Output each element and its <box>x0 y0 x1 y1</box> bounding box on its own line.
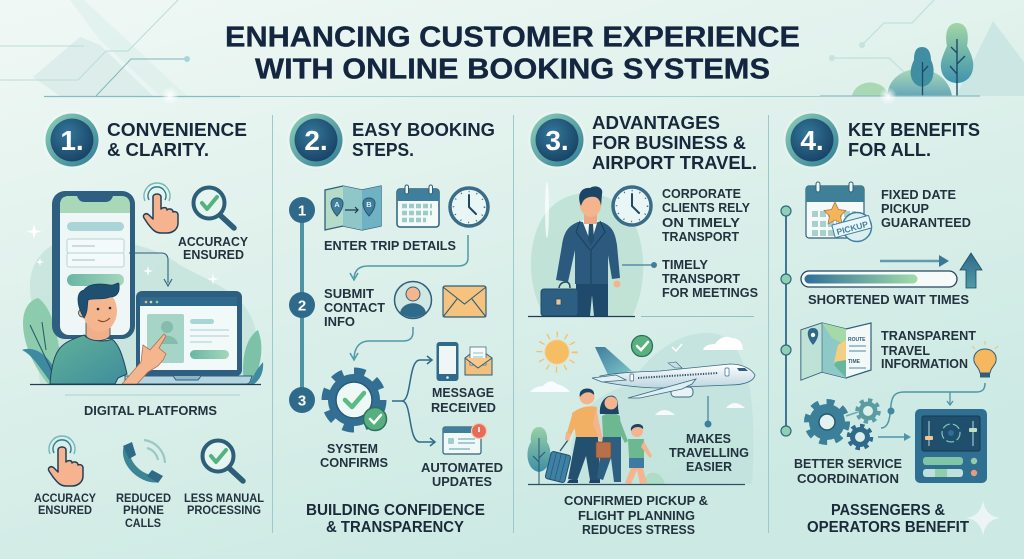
label: fixed date pickup guaranteed: GUARANTEED <box>881 215 971 230</box>
panel 2: easy booking steps <box>287 111 503 536</box>
illustration: airplane <box>592 347 755 398</box>
badge 4 <box>783 111 841 169</box>
timeline steps 1 to 3: 2 <box>298 298 306 314</box>
label: system confirms: CONFIRMS <box>320 455 388 470</box>
heading 2: EASY BOOKING <box>352 119 495 140</box>
label: corporate clients: CLIENTS RELY <box>662 200 750 215</box>
label: accuracy ensured: ACCURACY <box>178 234 248 249</box>
label: digital platforms: DIGITAL PLATFORMS <box>84 403 217 418</box>
icon: gears <box>807 400 879 448</box>
footer: building confidence and transparency: BUILDING CONFIDENCE <box>306 502 485 519</box>
label: submit contact info: INFO <box>324 314 355 329</box>
icon: gear with check <box>326 372 386 430</box>
footer: passengers and operators benefit: OPERATORS BENEFIT <box>807 519 970 536</box>
badge 3 <box>528 111 586 169</box>
footer: building confidence and transparency: & TRANSPARENCY <box>326 519 465 536</box>
heading 1 <box>107 119 247 160</box>
label: fixed date pickup guaranteed <box>881 187 971 230</box>
label: better service coordination: BETTER SERVICE <box>794 456 902 471</box>
label: timely transport: FOR MEETINGS <box>662 285 758 300</box>
heading 1: CONVENIENCE <box>107 119 247 140</box>
label: corporate clients: TRANSPORT <box>662 229 739 244</box>
label: makes travelling easier <box>669 431 749 474</box>
label: automated updates: UPDATES <box>432 474 492 489</box>
label: system confirms <box>320 441 388 470</box>
arrow: branch to outputs <box>392 356 435 446</box>
illustration: businessman with briefcase <box>528 182 754 316</box>
label: message received: MESSAGE <box>432 385 494 400</box>
decoration: top-left circuit lines and hill <box>0 0 240 105</box>
label: reduced phone calls: CALLS <box>125 518 161 530</box>
label: timely transport: TIMELY <box>662 257 708 272</box>
footer: confirmed pickup and flight planning <box>564 493 708 537</box>
title: WITH ONLINE BOOKING SYSTEMS <box>255 53 770 85</box>
footer: passengers and operators benefit: PASSENGERS & <box>831 502 945 519</box>
progress bar <box>801 271 957 287</box>
icon: control panel <box>915 409 987 483</box>
label: corporate clients: ON TIMELY <box>662 215 740 230</box>
label: accuracy ensured: ENSURED <box>183 247 244 262</box>
arrow: step 2 to step 3 <box>350 327 413 360</box>
icon: envelope <box>443 286 486 317</box>
label: submit contact info: CONTACT <box>324 300 385 315</box>
timeline steps 1 to 3: 1 <box>298 202 306 220</box>
footer: confirmed pickup and flight planning: REDUCES STRESS <box>582 522 695 537</box>
label: fixed date pickup guaranteed: PICKUP <box>881 201 929 216</box>
panel 1: convenience and clarity <box>22 111 264 530</box>
decoration: sparkle <box>966 500 1000 536</box>
icon: sun <box>540 334 574 370</box>
label: makes travelling easier: MAKES <box>686 431 731 446</box>
label: corporate clients <box>662 186 750 244</box>
icon: browser alert <box>443 424 486 454</box>
label: enter trip details: ENTER TRIP DETAILS <box>324 238 456 253</box>
title <box>225 22 800 85</box>
label: submit contact info: SUBMIT <box>324 286 374 301</box>
timeline steps 1 to 3 <box>289 197 315 413</box>
label: automated updates: AUTOMATED <box>421 460 503 475</box>
icon: magnifier with check <box>194 188 234 228</box>
label: better service coordination <box>794 456 902 486</box>
panel 3: advantages for business and airport travel <box>527 111 758 537</box>
heading 3: FOR BUSINESS & <box>592 132 746 153</box>
connector arrows to control panel <box>878 383 985 441</box>
icon: clock <box>613 187 651 225</box>
label: timely transport: TRANSPORT <box>662 271 740 286</box>
icon: light bulb <box>972 341 998 378</box>
icon: route map A to B: B <box>366 200 372 209</box>
badge 4: 4. <box>800 125 824 156</box>
icon: calendar <box>397 185 439 227</box>
icon: check badge <box>632 336 652 356</box>
heading 4 <box>848 119 980 160</box>
timeline with nodes <box>781 206 791 436</box>
badge 2 <box>287 111 345 169</box>
icon: contact person <box>394 282 432 318</box>
heading 2 <box>352 119 495 160</box>
heading 4: KEY BENEFITS <box>848 119 980 140</box>
icon: clock <box>450 188 488 226</box>
illustration: person with phone and laptop <box>22 191 263 384</box>
icon: calendar with pickup stamp <box>806 182 872 242</box>
label: transparent travel information: TRANSPARENT <box>881 328 976 343</box>
arrow: step 1 to step 2 <box>350 235 468 280</box>
icon: route map: ROUTE <box>848 337 866 343</box>
icon: up arrow <box>960 253 982 288</box>
label: less manual processing: LESS MANUAL <box>184 493 264 505</box>
footer: building confidence and transparency <box>306 502 485 536</box>
icon: route map <box>801 323 871 380</box>
label: message received <box>431 385 496 415</box>
label: accuracy ensured small <box>34 493 96 517</box>
label: message received: RECEIVED <box>431 400 496 415</box>
label: timely transport <box>662 257 758 300</box>
heading 3: AIRPORT TRAVEL. <box>592 152 757 173</box>
label: accuracy ensured <box>178 234 248 262</box>
badge 1: 1. <box>60 125 84 156</box>
label: reduced phone calls: PHONE <box>123 505 164 517</box>
icon: magnifier small <box>202 440 243 481</box>
footer: confirmed pickup and flight planning: FLIGHT PLANNING <box>578 508 695 523</box>
icon: route map A to B <box>325 186 381 230</box>
panel 4: key benefits for all <box>781 111 1000 536</box>
heading 3: ADVANTAGES <box>592 112 720 133</box>
footer: confirmed pickup and flight planning: CONFIRMED PICKUP & <box>564 493 708 508</box>
scene background: sky blob and clouds <box>530 333 753 484</box>
icon: calendar with pickup stamp: PICKUP <box>835 219 869 237</box>
label: system confirms: SYSTEM <box>327 441 378 456</box>
label: corporate clients: CORPORATE <box>662 186 741 201</box>
label: submit contact info <box>324 286 385 329</box>
heading 1: & CLARITY. <box>107 139 209 160</box>
icon: route map A to B: A <box>334 200 340 209</box>
badge 2: 2. <box>304 125 328 156</box>
label: transparent travel information: TRAVEL <box>881 343 930 358</box>
callout line to makes travelling easier <box>704 396 712 428</box>
label: less manual processing <box>184 493 264 517</box>
label: accuracy ensured small: ACCURACY <box>34 493 96 505</box>
label: reduced phone calls: REDUCED <box>116 493 171 505</box>
icon: phone and open mail <box>436 342 492 381</box>
icon: route map: TIME <box>848 359 861 365</box>
icon: speed arrow <box>880 255 949 267</box>
label: shortened wait times: SHORTENED WAIT TIMES <box>808 292 969 307</box>
footer: passengers and operators benefit <box>807 502 970 536</box>
callout line to timely transport <box>622 262 657 268</box>
label: fixed date pickup guaranteed: FIXED DATE <box>881 187 956 202</box>
decoration: top-right trees and mountain <box>820 0 1024 105</box>
label: makes travelling easier: EASIER <box>686 459 733 474</box>
label: less manual processing: PROCESSING <box>187 505 261 517</box>
label: reduced phone calls <box>116 493 171 530</box>
icon: tap hand small <box>48 436 83 486</box>
heading 3 <box>592 112 757 173</box>
badge 3: 3. <box>545 125 569 156</box>
label: better service coordination: COORDINATION <box>797 471 899 486</box>
illustration: family with luggage <box>527 388 745 484</box>
timeline steps 1 to 3: 3 <box>298 392 306 410</box>
label: automated updates <box>421 460 503 489</box>
title: ENHANCING CUSTOMER EXPERIENCE <box>225 22 800 54</box>
icon: phone call <box>123 440 165 483</box>
label: transparent travel information: INFORMATION <box>881 356 968 371</box>
label: transparent travel information <box>881 328 976 371</box>
heading 2: STEPS. <box>352 139 414 160</box>
heading 4: FOR ALL. <box>848 139 931 160</box>
icon: tap hand <box>143 183 178 233</box>
badge 1 <box>43 111 101 169</box>
label: accuracy ensured small: ENSURED <box>38 505 92 517</box>
label: makes travelling easier: TRAVELLING <box>669 445 749 460</box>
